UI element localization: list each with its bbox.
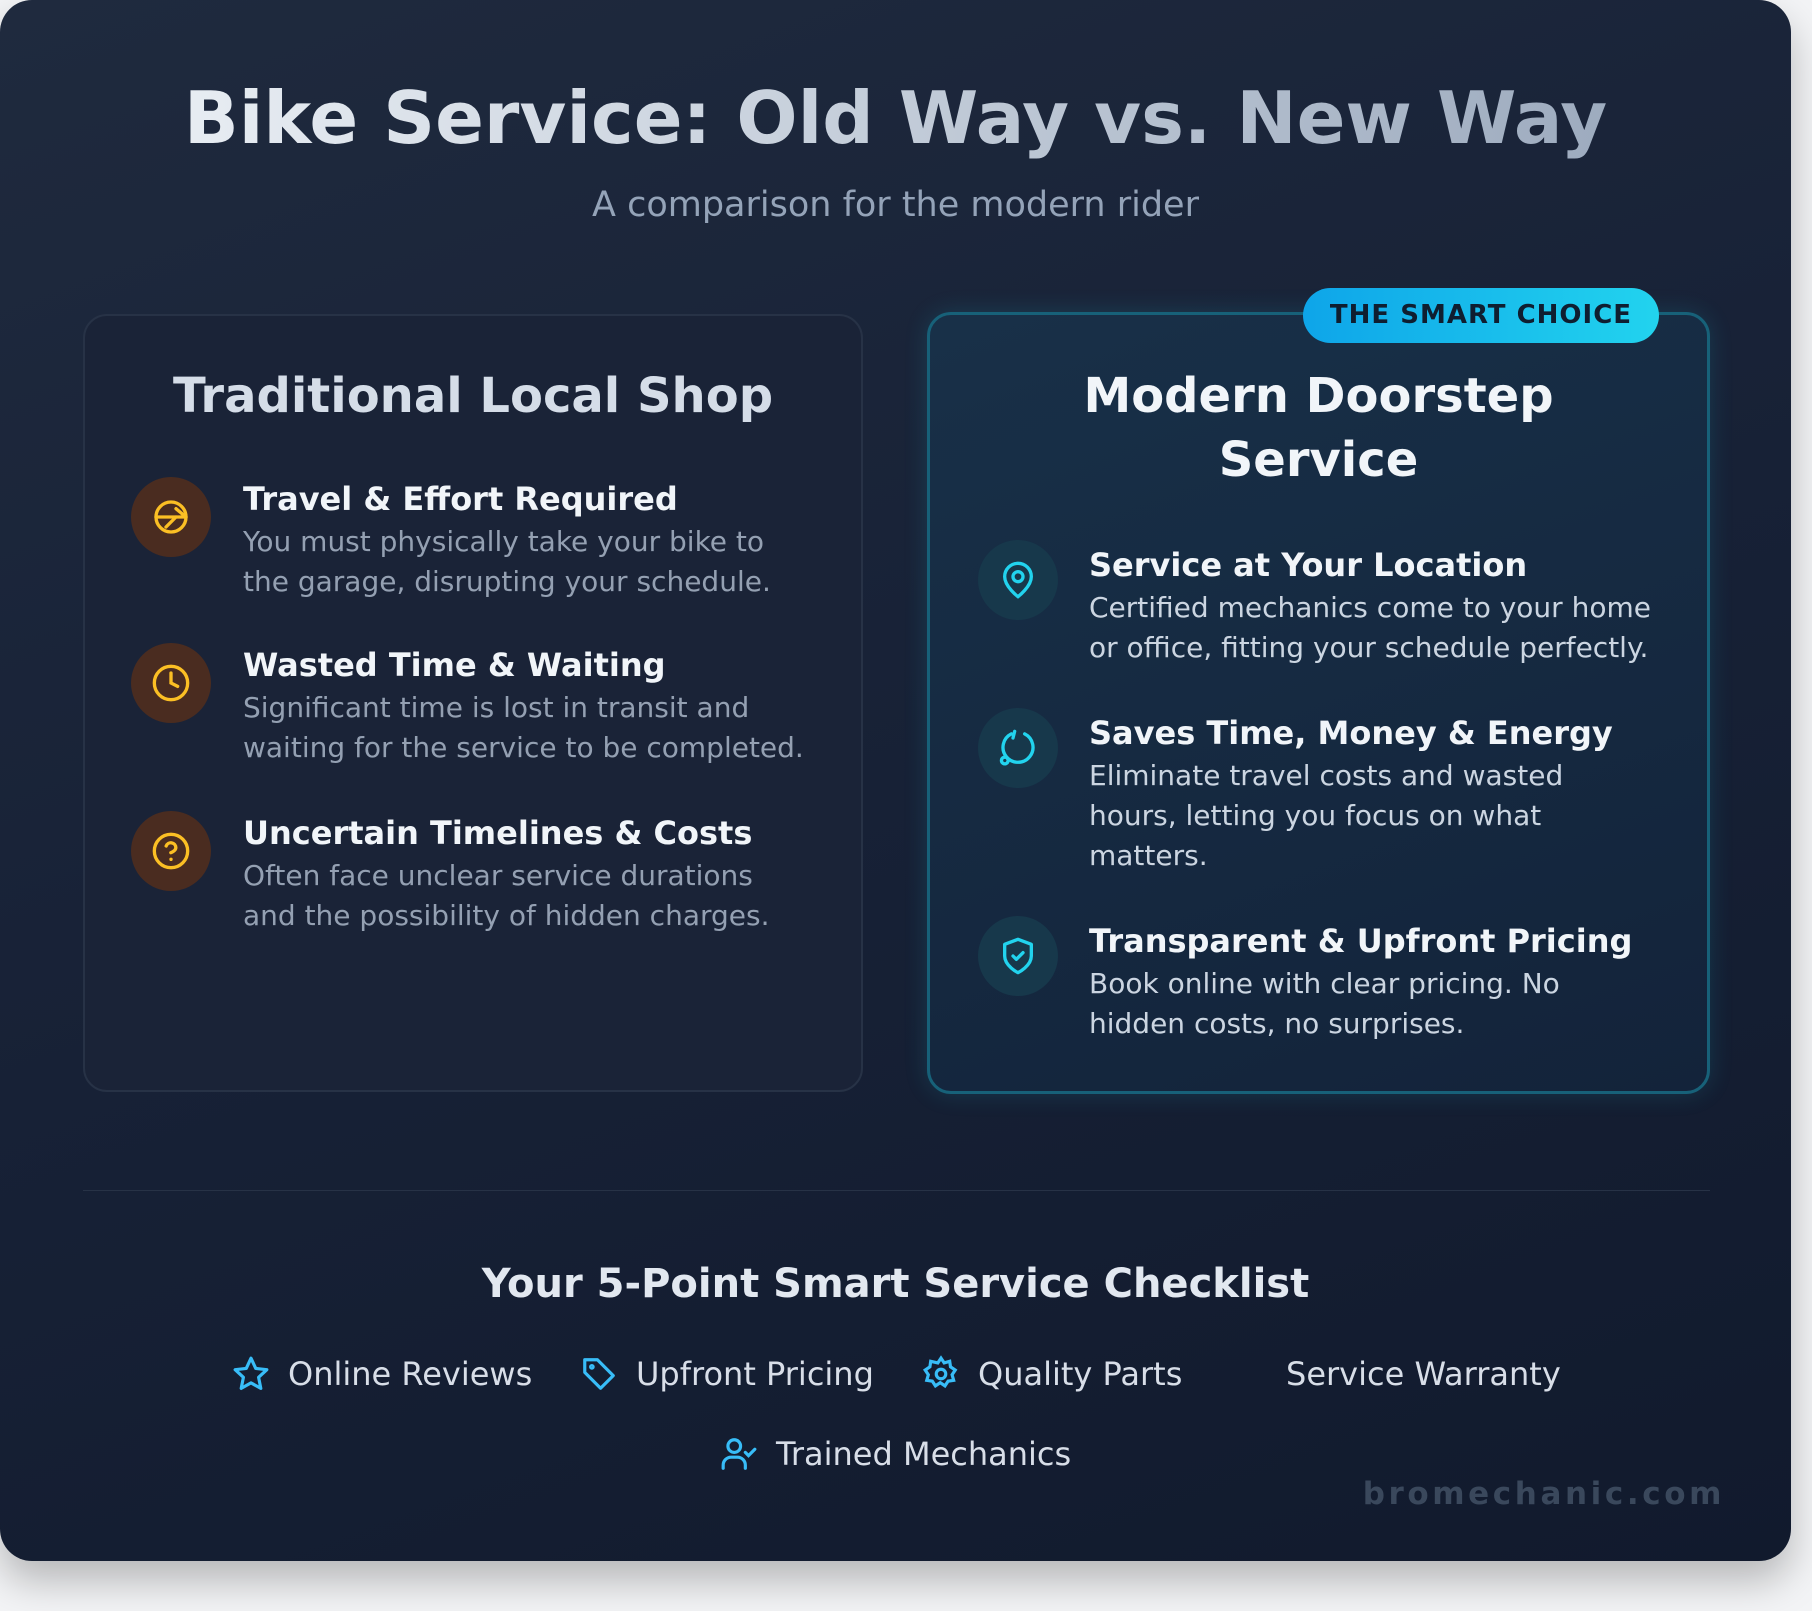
check: online reviews: Online Reviews bbox=[288, 1355, 532, 1393]
icon: loop bbox=[978, 708, 1058, 788]
item: location: Certified mechanics come to your home bbox=[1089, 591, 1651, 624]
item: pricing: hidden costs, no surprises. bbox=[1089, 1007, 1464, 1040]
item: saves time: Eliminate travel costs and wasted bbox=[1089, 759, 1563, 792]
icon: clock bbox=[131, 643, 211, 723]
check: upfront pricing: Upfront Pricing bbox=[636, 1355, 874, 1393]
item: pricing: Transparent & Upfront Pricing bbox=[1089, 922, 1632, 960]
item: location: or office, fitting your schedule perfectly. bbox=[1089, 631, 1648, 664]
item: travel bbox=[131, 477, 771, 598]
item: wasted time: Significant time is lost in transit and bbox=[243, 691, 749, 724]
item: wasted time bbox=[131, 643, 804, 764]
heading: modern bbox=[1083, 368, 1554, 488]
item: uncertain: Often face unclear service durations bbox=[243, 859, 753, 892]
item: travel: Travel & Effort Required bbox=[243, 480, 678, 518]
icon: shield check bbox=[978, 916, 1058, 996]
badge: the smart choice: THE SMART CHOICE bbox=[1330, 300, 1632, 330]
item: saves time: matters. bbox=[1089, 839, 1208, 872]
title: Bike Service: Old Way vs. New Way bbox=[184, 76, 1607, 160]
item: pricing: Book online with clear pricing. No bbox=[1089, 967, 1560, 1000]
checklist heading: Your 5-Point Smart Service Checklist bbox=[482, 1261, 1309, 1307]
item: uncertain bbox=[131, 811, 770, 932]
subtitle: A comparison for the modern rider bbox=[592, 185, 1199, 225]
icon: arrow circle bbox=[131, 477, 211, 557]
panel: modern doorstep service bbox=[927, 312, 1710, 1094]
item: saves time bbox=[978, 708, 1613, 872]
item: travel: the garage, disrupting your schedule. bbox=[243, 565, 771, 598]
badge: the smart choice bbox=[1303, 288, 1659, 343]
item: wasted time: Wasted Time & Waiting bbox=[243, 646, 666, 684]
heading: modern: Modern Doorstep bbox=[1083, 368, 1554, 424]
item: uncertain: Uncertain Timelines & Costs bbox=[243, 814, 752, 852]
check: trained mechanics: Trained Mechanics bbox=[776, 1435, 1071, 1473]
item: uncertain: and the possibility of hidden charges. bbox=[243, 899, 770, 932]
check: service warranty: Service Warranty bbox=[1286, 1355, 1561, 1393]
item: location: Service at Your Location bbox=[1089, 546, 1527, 584]
check: quality parts: Quality Parts bbox=[978, 1355, 1182, 1393]
heading: traditional: Traditional Local Shop bbox=[173, 368, 773, 424]
item: wasted time: waiting for the service to be completed. bbox=[243, 731, 804, 764]
icon: map pin bbox=[978, 540, 1058, 620]
item: travel: You must physically take your bike to bbox=[243, 525, 764, 558]
item: saves time: Saves Time, Money & Energy bbox=[1089, 714, 1613, 752]
item: saves time: hours, letting you focus on what bbox=[1089, 799, 1541, 832]
item: location bbox=[978, 540, 1651, 664]
heading: modern: Service bbox=[1219, 432, 1418, 488]
item: pricing bbox=[978, 916, 1632, 1040]
panel: traditional local shop bbox=[83, 314, 863, 1092]
watermark: bromechanic.com bbox=[1363, 1476, 1725, 1512]
checklist bbox=[234, 1355, 1561, 1473]
icon: question bbox=[131, 811, 211, 891]
